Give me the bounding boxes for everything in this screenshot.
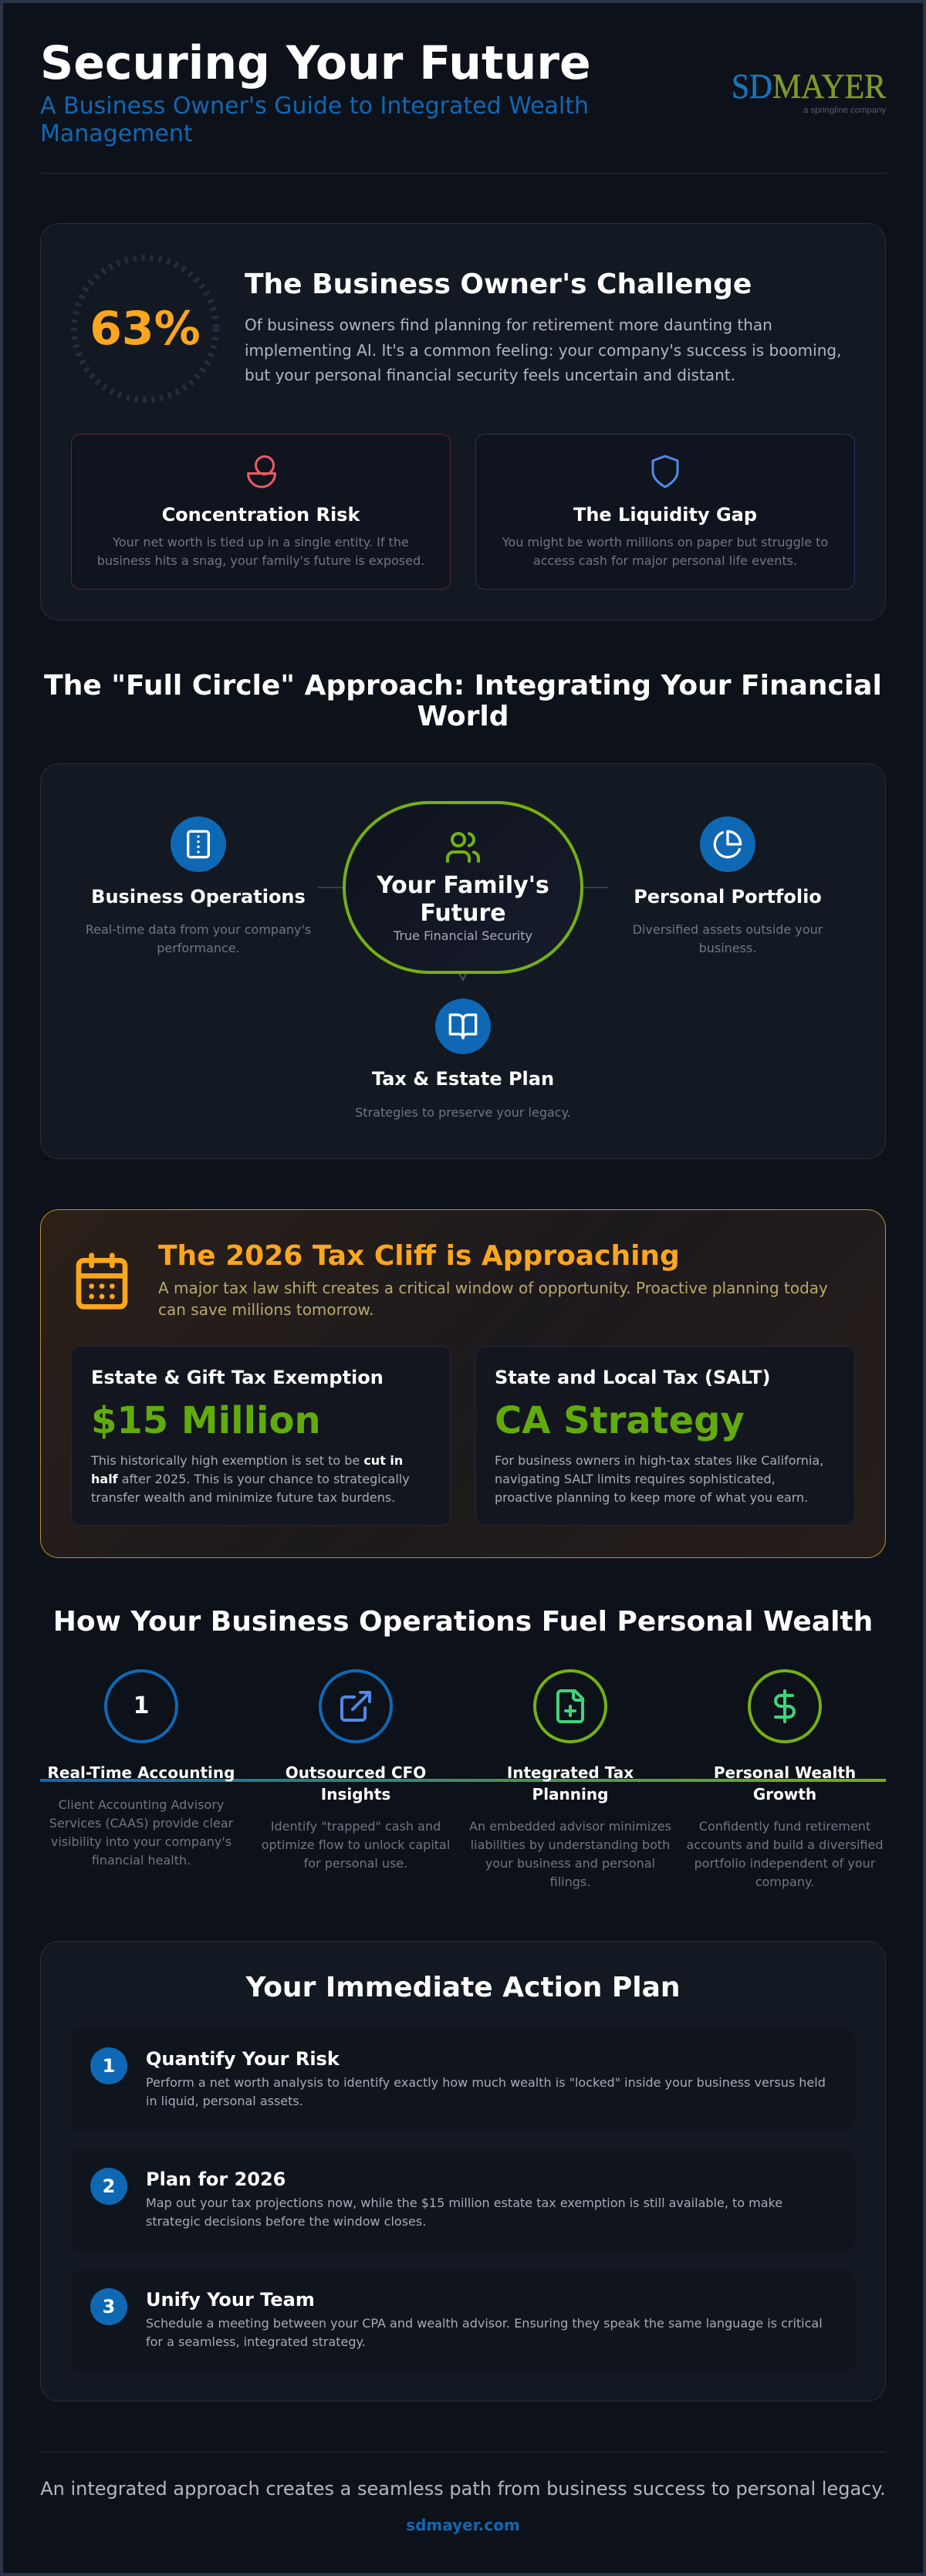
stat: 15 million: $15 Million <box>91 1399 321 1442</box>
icon: external link <box>340 1690 372 1722</box>
heading: your family's future: Future <box>420 900 506 927</box>
text: liquidity gap <box>502 535 828 568</box>
text: business operations: Real-time data from your company's <box>86 922 311 937</box>
action step 1 <box>71 2029 855 2131</box>
icon: book <box>435 999 491 1054</box>
node: business operations <box>86 816 311 955</box>
badge: 1 <box>104 1669 178 1743</box>
heading: integrated tax planning: Planning <box>532 1785 608 1804</box>
heading: concentration risk: Concentration Risk <box>162 504 360 526</box>
text: real-time accounting: Services (CAAS) provide clear <box>49 1816 233 1831</box>
text: personal portfolio: Diversified assets outside your <box>633 922 823 937</box>
logo: SD Mayer: a springline company <box>803 106 887 115</box>
text: estate exemption: transfer wealth and minimize future tax burdens. <box>91 1490 395 1505</box>
text: quantify your risk: Perform a net worth analysis to identify exactly how much wealth is "locked" inside your business versus held <box>146 2075 826 2090</box>
connector: left <box>318 887 343 888</box>
number 2: 2 <box>103 2175 115 2197</box>
text: real-time accounting: financial health. <box>92 1853 191 1868</box>
card: state and local tax <box>475 1346 855 1526</box>
text: concentration risk: Your net worth is tied up in a single entity. If the <box>113 535 409 549</box>
subtitle <box>40 93 589 147</box>
step: real-time accounting <box>48 1669 235 1868</box>
connector: bottom chevron <box>458 974 466 982</box>
heading: tax cliff: The 2026 Tax Cliff is Approaching <box>158 1240 680 1272</box>
text: business operations <box>86 922 311 955</box>
text: unify your team: for a seamless, integrated strategy. <box>146 2334 366 2349</box>
panel: the business owner's challenge <box>40 223 886 620</box>
panel: 2026 tax cliff <box>40 1209 886 1558</box>
node: personal portfolio <box>633 816 823 955</box>
text: outsourced CFO insights: for personal use. <box>304 1856 407 1871</box>
heading: integrated tax planning: Integrated Tax <box>507 1763 634 1782</box>
text: tax cliff description <box>158 1279 828 1319</box>
text: integrated tax planning: An embedded advisor minimizes <box>469 1819 671 1834</box>
stat: 63 percent: 63% <box>90 302 201 356</box>
number 3 <box>90 2288 127 2325</box>
logo: SD Mayer: MAYER <box>772 67 886 106</box>
text: liquidity gap: access cash for major personal life events. <box>533 553 797 568</box>
panel: immediate action plan <box>40 1941 886 2402</box>
number 2 <box>90 2168 127 2205</box>
heading: outsourced CFO insights: Outsourced CFO <box>286 1763 426 1782</box>
text: integrated tax planning <box>469 1819 671 1889</box>
text: personal portfolio: business. <box>699 941 756 955</box>
logo: SD Mayer <box>732 67 887 115</box>
center node: your family's future <box>343 801 583 974</box>
heading: personal wealth growth <box>714 1763 856 1804</box>
icon: file plus <box>556 1689 584 1723</box>
text: personal wealth growth: portfolio independent of your <box>694 1856 875 1871</box>
heading: personal wealth growth: Growth <box>753 1785 816 1804</box>
text: personal wealth growth: accounts and build a diversified <box>686 1837 884 1852</box>
heading: plan for 2026: Plan for 2026 <box>146 2169 286 2190</box>
panel: full circle diagram <box>40 763 886 1159</box>
text: estate exemption: This historically high exemption is set to be cut in <box>91 1453 403 1468</box>
badge: 1: 1 <box>133 1692 149 1719</box>
action step 3 <box>71 2270 855 2371</box>
card: concentration risk <box>71 434 451 590</box>
text: concentration risk: business hits a snag, your family's future is exposed. <box>97 553 424 568</box>
text: outsourced CFO insights <box>262 1819 450 1871</box>
heading: action plan: Your Immediate Action Plan <box>245 1972 681 2003</box>
text: SALT: proactive planning to keep more of what you earn. <box>495 1490 808 1505</box>
icon: calendar <box>76 1253 128 1310</box>
text: tax cliff description: A major tax law shift creates a critical window of opportunity. Proactive planning today <box>158 1279 828 1297</box>
heading: full circle approach: World <box>417 701 509 732</box>
text: outsourced CFO insights: Identify "trapped" cash and <box>271 1819 441 1834</box>
text: plan for 2026: Map out your tax projections now, while the $15 million estate tax exemption is still available, to make <box>146 2196 782 2210</box>
text: estate exemption: half after 2025. This is your chance to strategically <box>91 1472 410 1486</box>
stat: CA strategy: CA Strategy <box>495 1399 745 1442</box>
text: SALT <box>495 1453 823 1505</box>
icon: users <box>446 832 480 863</box>
step: personal wealth growth <box>686 1669 884 1889</box>
node: tax and estate plan <box>355 999 571 1120</box>
text: SALT: For business owners in high-tax states like California, <box>495 1453 823 1468</box>
text: real-time accounting <box>49 1797 233 1868</box>
text: outsourced CFO insights: optimize flow to unlock capital <box>262 1837 450 1852</box>
text: concentration risk <box>97 535 424 568</box>
heading: your family's future: Your Family's <box>377 872 549 899</box>
step: integrated tax planning <box>469 1669 671 1889</box>
heading: your family's future <box>377 872 549 927</box>
icon: concentration risk <box>247 455 276 488</box>
card: the liquidity gap <box>475 434 855 590</box>
card: estate and gift tax exemption <box>71 1346 451 1526</box>
text: challenge description: implementing AI. It's a common feeling: your company's success is booming, <box>245 341 841 360</box>
text: tax cliff description: can save millions tomorrow. <box>158 1300 373 1319</box>
heading: personal portfolio: Personal Portfolio <box>634 886 822 908</box>
badge: dollar <box>748 1669 822 1743</box>
text: unify your team: Schedule a meeting between your CPA and wealth advisor. Ensuring they speak the same language is critical <box>146 2316 823 2331</box>
text: integrated tax planning: liabilities by understanding both <box>471 1837 670 1852</box>
heading: outsourced CFO insights <box>286 1763 426 1804</box>
heading: full circle approach: The "Full Circle" Approach: Integrating Your Financial <box>44 670 882 701</box>
icon: shield <box>651 455 679 488</box>
logo: SD Mayer: SD <box>732 67 772 106</box>
text: personal portfolio <box>633 922 823 955</box>
text: business operations: performance. <box>157 941 240 955</box>
text: unify your team <box>146 2316 823 2349</box>
number 3: 3 <box>103 2296 115 2317</box>
title: Securing Your Future <box>40 36 591 90</box>
text: challenge description: but your personal financial security feels uncertain and distant. <box>245 366 735 384</box>
heading: full circle approach <box>44 670 882 732</box>
text: integrated tax planning: your business and personal <box>485 1856 655 1871</box>
text: liquidity gap: You might be worth millions on paper but struggle to <box>502 535 828 549</box>
icon: dollar sign <box>774 1689 796 1723</box>
text: personal wealth growth: company. <box>755 1875 814 1889</box>
text: SALT: navigating SALT limits requires sophisticated, <box>495 1472 776 1486</box>
text: estate exemption <box>91 1453 410 1505</box>
heading: estate and gift: Estate & Gift Tax Exemption <box>91 1367 384 1388</box>
text: personal wealth growth: Confidently fund retirement <box>699 1819 870 1834</box>
heading: SALT: State and Local Tax (SALT) <box>495 1367 770 1388</box>
heading: liquidity gap: The Liquidity Gap <box>573 504 757 526</box>
timeline line <box>40 1779 886 1782</box>
text: plan for 2026: strategic decisions before the window closes. <box>146 2214 426 2229</box>
number 1 <box>90 2047 127 2084</box>
connector: right <box>583 887 608 888</box>
heading: business operations fuel wealth: How Your Business Operations Fuel Personal Wealth <box>53 1606 873 1638</box>
badge: file plus <box>533 1669 607 1743</box>
heading: real-time accounting: Real-Time Accounting <box>48 1763 235 1782</box>
icon: pie chart <box>700 816 755 872</box>
heading: business operations: Business Operations <box>91 886 306 908</box>
text: tax and estate plan: Strategies to preserve your legacy. <box>355 1105 571 1120</box>
badge: external link <box>319 1669 393 1743</box>
footer tagline: An integrated approach creates a seamless path from business success to personal legacy. <box>40 2478 886 2500</box>
heading: outsourced CFO insights: Insights <box>321 1785 390 1804</box>
text: real-time accounting: visibility into your company's <box>51 1834 231 1849</box>
number 1: 1 <box>103 2055 115 2077</box>
text: quantify your risk: in liquid, personal assets. <box>146 2094 303 2108</box>
step: outsourced CFO insights <box>262 1669 450 1871</box>
subtitle: A Business Owner's Guide to Integrated Wealth <box>40 93 589 120</box>
action step 2 <box>71 2149 855 2251</box>
heading: unify your team: Unify Your Team <box>146 2289 315 2311</box>
heading: personal wealth growth: Personal Wealth <box>714 1763 856 1782</box>
text: plan for 2026 <box>146 2196 782 2229</box>
text: integrated tax planning: filings. <box>550 1875 590 1889</box>
text: real-time accounting: Client Accounting Advisory <box>59 1797 224 1812</box>
text: challenge description <box>245 316 841 384</box>
stat ring: 63% <box>71 255 219 403</box>
heading: challenge: The Business Owner's Challenge <box>245 269 752 300</box>
heading: integrated tax planning <box>507 1763 634 1804</box>
footer link: sdmayer.com <box>406 2516 520 2534</box>
heading: tax and estate plan: Tax & Estate Plan <box>372 1068 554 1090</box>
subtitle: Management <box>40 120 193 147</box>
icon: business operations <box>171 816 226 872</box>
text: true financial security: True Financial Security <box>394 928 532 943</box>
text: challenge description: Of business owners find planning for retirement more daunting than <box>245 316 772 334</box>
text: quantify your risk <box>146 2075 826 2108</box>
heading: quantify your risk: Quantify Your Risk <box>146 2048 340 2070</box>
text: personal wealth growth <box>686 1819 884 1889</box>
